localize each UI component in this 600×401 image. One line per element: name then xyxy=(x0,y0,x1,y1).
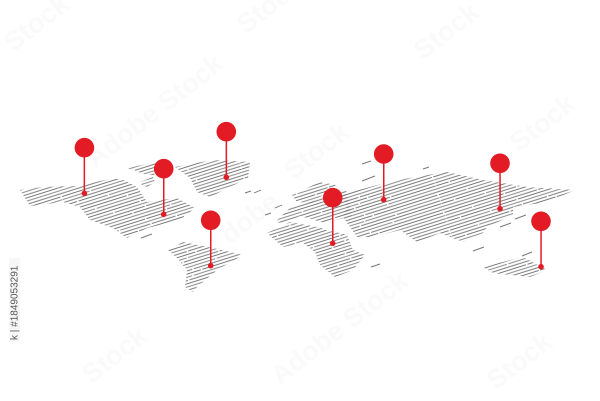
watermark text: dobe xyxy=(215,186,284,250)
map: africa xyxy=(267,222,365,277)
map: australia xyxy=(483,257,547,277)
watermark text: Stock xyxy=(504,88,581,157)
pin: africa xyxy=(323,188,343,246)
map: greenland xyxy=(175,160,250,197)
watermark text: Adobe Stock xyxy=(80,48,229,174)
watermark text: Stock xyxy=(278,116,355,185)
map: north america xyxy=(20,179,195,238)
world map xyxy=(20,160,575,292)
map: small islands xyxy=(141,161,532,267)
map: europe xyxy=(275,182,352,223)
pin: east asia xyxy=(490,154,510,212)
pin: australia xyxy=(531,212,551,270)
watermark text: Stock xyxy=(481,326,558,395)
pin: greenland xyxy=(216,122,236,180)
pin: russia xyxy=(374,144,394,202)
pin: alaska xyxy=(75,138,94,196)
pin: south america xyxy=(201,210,220,269)
pin: north america xyxy=(154,159,174,217)
watermark text: Stock xyxy=(76,320,153,389)
watermark text: Adobe Stock xyxy=(265,265,414,391)
map: arctic islands xyxy=(127,162,173,187)
map: asia xyxy=(340,172,575,242)
image id label: k | #1849053291 xyxy=(10,265,20,340)
map: south america xyxy=(168,242,243,292)
